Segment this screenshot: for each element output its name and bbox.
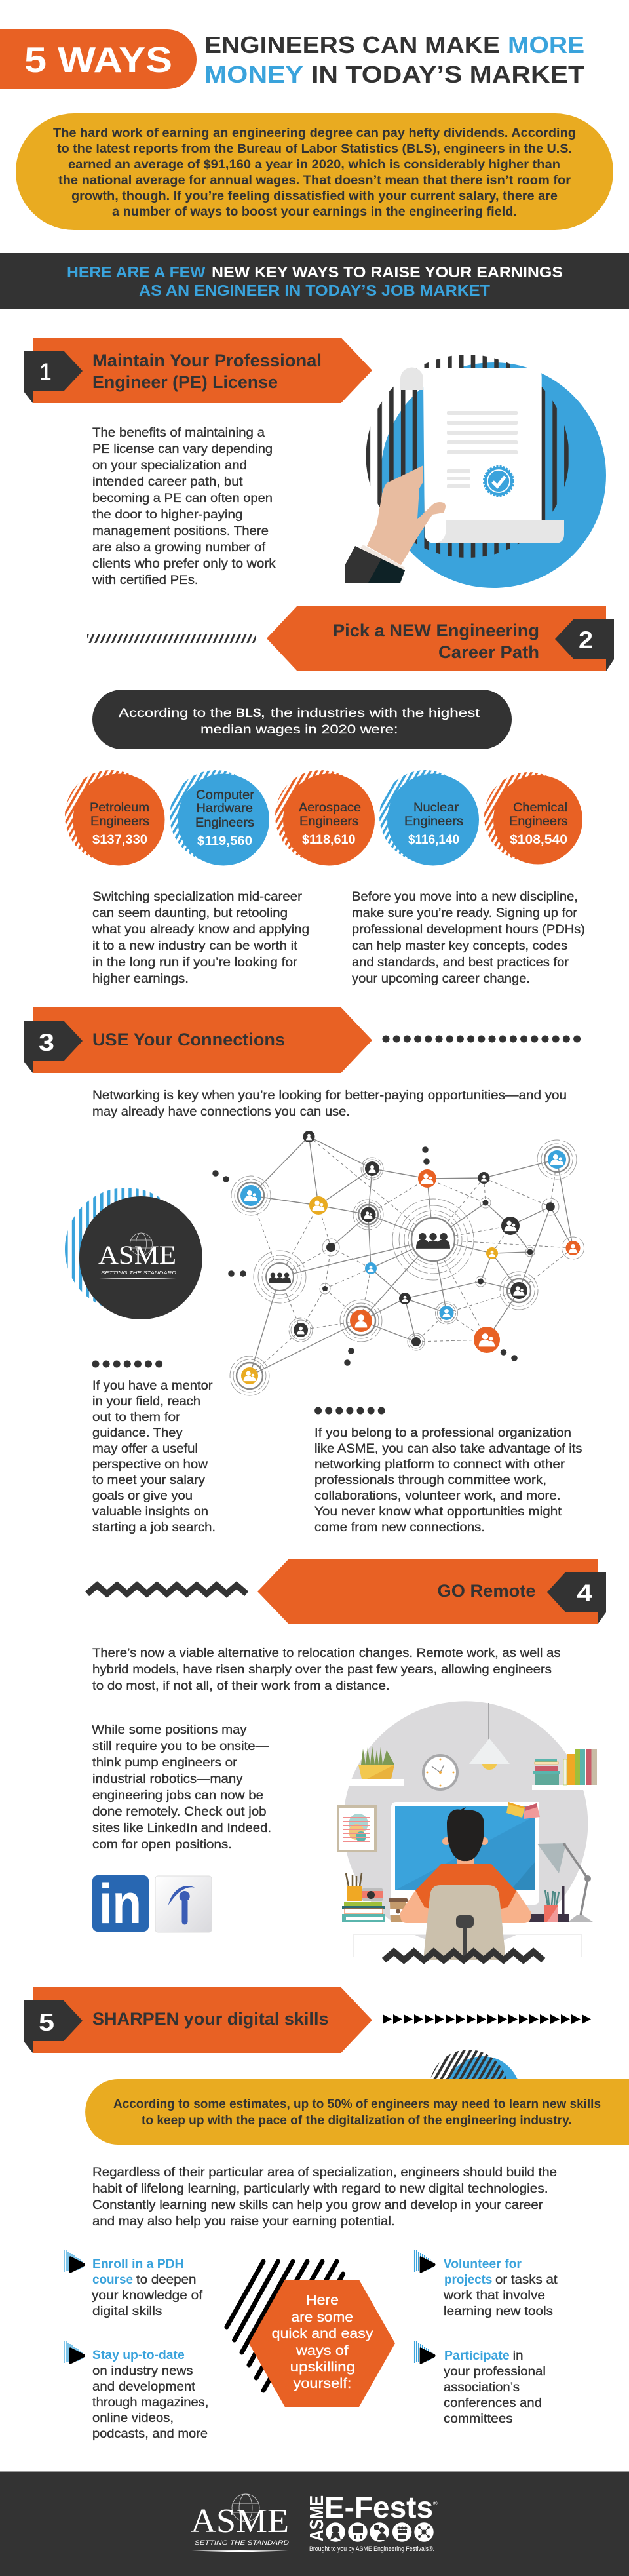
circle: aerospace engineers: $118,610 <box>302 832 356 847</box>
circle: computer hardware engineers: Hardware <box>197 801 253 815</box>
section 2 banner: Pick a NEW Engineering <box>333 621 539 640</box>
illustration: hand holding certificate <box>345 355 606 588</box>
network person nodes <box>240 1131 581 1384</box>
circle: chemical engineers: Chemical <box>513 800 567 815</box>
arrow row <box>383 2014 591 2024</box>
section 2 left text: Switching specialization mid-career <box>92 890 303 904</box>
book shelf <box>532 1749 600 1790</box>
section 2 banner <box>267 606 614 671</box>
intro callout: The hard work of earning an engineering degree can pay hefty dividends. According <box>53 127 576 140</box>
section 4 intro text: to do most, if not all, of their work from a distance. <box>92 1679 390 1693</box>
tip: participate <box>415 2341 546 2426</box>
desk lamp <box>537 1843 593 1922</box>
section 2 right text: make sure you’re ready. Signing up for <box>352 907 578 920</box>
network diagram <box>212 1131 584 1395</box>
circle: nuclear engineers: Nuclear <box>413 800 459 815</box>
section 2 left text: can seem daunting, but retooling <box>92 907 288 920</box>
tip: participate: conferences and <box>444 2396 542 2410</box>
section 1 body text: are also a growing number of <box>92 541 266 555</box>
section 1 banner <box>24 338 372 403</box>
circle: chemical engineers <box>484 772 582 864</box>
intro callout <box>16 113 613 230</box>
section 3 left text: to meet your salary <box>92 1473 206 1487</box>
tip: enroll in a PDH: to deepen <box>136 2273 197 2287</box>
industries callout <box>92 690 512 749</box>
network dashed links <box>250 1137 573 1376</box>
hexagon callout: are some <box>292 2310 353 2325</box>
monitor <box>391 1802 539 1905</box>
ASME logo badge <box>65 1188 202 1319</box>
tip: enroll in a PDH <box>64 2250 203 2318</box>
yellow statistic band: According to some estimates, up to 50% of engineers may need to learn new skills <box>113 2098 601 2111</box>
title: MONEY <box>204 61 303 88</box>
circle: aerospace engineers <box>275 770 375 865</box>
section 2 right text: your upcoming career change. <box>352 972 530 986</box>
section 1 body text: becoming a PE can often open <box>92 492 273 505</box>
circle: nuclear engineers: Engineers <box>404 814 463 829</box>
section 5 body text: and may also help you raise your earning potential. <box>92 2215 395 2229</box>
section 3 right text: collaborations, volunteer work, and more. <box>314 1489 561 1503</box>
ASME logo badge: ASME <box>98 1240 176 1270</box>
wall clock <box>422 1754 459 1791</box>
icon: Indeed <box>155 1876 212 1932</box>
section 3 left text: in your field, reach <box>92 1395 200 1409</box>
section 5 banner: 5 <box>39 2009 54 2036</box>
circle: petroleum engineers <box>65 770 165 865</box>
section 2 left text: it to a new industry can be worth it <box>92 939 298 953</box>
section 2 left text: what you already know and applying <box>92 923 309 937</box>
tip: volunteer for projects: projects <box>444 2273 492 2287</box>
tip: volunteer for projects: or tasks at <box>495 2273 558 2287</box>
section 3 intro text <box>92 1089 567 1119</box>
office chair <box>423 1885 506 1960</box>
section 2 left text: in the long run if you’re looking for <box>92 956 298 969</box>
section 3 left text: may offer a useful <box>92 1442 198 1456</box>
section 1 banner: 1 <box>40 359 51 385</box>
industries callout: BLS, <box>236 706 265 720</box>
section 2 banner: 2 <box>579 627 593 654</box>
section 4 banner <box>257 1559 606 1624</box>
footer: E-Fests logo: ASME <box>307 2495 328 2541</box>
tip: participate: committees <box>444 2412 513 2426</box>
section 1 body text: the door to higher-paying <box>92 508 242 522</box>
circle: computer hardware engineers: $119,560 <box>197 834 252 848</box>
section 4 body text: think pump engineers or <box>92 1756 238 1770</box>
section 3 right text <box>314 1426 582 1534</box>
circle: computer hardware engineers: Computer <box>196 788 255 802</box>
intro callout: to the latest reports from the Bureau of Labor Statistics (BLS), engineers in the U.S. <box>57 142 572 156</box>
section 3 left text: guidance. They <box>92 1426 183 1440</box>
intro callout: earned an average of $91,160 a year in 2020, which is considerably higher than <box>68 158 560 172</box>
section 4 body text: engineering jobs can now be <box>92 1789 263 1803</box>
industries callout: According to the <box>119 707 232 720</box>
decorative hatch line <box>87 634 256 643</box>
section 4 body text: industrial robotics—many <box>92 1772 243 1786</box>
section 4 body text: sites like LinkedIn and Indeed. <box>92 1822 271 1835</box>
section 3 intro text: may already have connections you can use. <box>92 1105 350 1119</box>
intro callout: growth, though. If you’re feeling dissatisfied with your current salary, there are <box>71 189 558 203</box>
tip: stay up-to-date: Stay up-to-date <box>92 2349 185 2362</box>
circle: computer hardware engineers: Engineers <box>195 815 254 830</box>
yellow statistic band: to keep up with the pace of the digitalization of the engineering industry. <box>142 2114 572 2128</box>
section 3 left text: If you have a mentor <box>92 1379 213 1393</box>
section 3 intro text: Networking is key when you’re looking for better-paying opportunities—and you <box>92 1089 567 1103</box>
section 1 body text: on your specialization and <box>92 459 247 473</box>
tip: stay up-to-date: through magazines, <box>92 2396 208 2410</box>
section 3 right dots <box>318 1407 382 1415</box>
intro callout: a number of ways to boost your earnings in the engineering field. <box>112 205 517 219</box>
hexagon callout: yourself: <box>294 2376 351 2391</box>
hexagon callout <box>249 2280 395 2407</box>
person <box>400 1807 531 1923</box>
icon: play bullet <box>64 2341 85 2364</box>
footer: ASME logo: SETTING THE STANDARD <box>195 2539 289 2547</box>
hexagon callout: upskilling <box>290 2360 355 2375</box>
section 3 left text: out to them for <box>92 1411 181 1424</box>
section 5 banner: SHARPEN your digital skills <box>92 2009 329 2029</box>
section 3 right text: If you belong to a professional organization <box>314 1426 571 1440</box>
section 2 banner: Career Path <box>438 642 539 662</box>
header: 5 ways tab: 5 WAYS <box>24 39 172 80</box>
wall circle <box>343 1701 588 1946</box>
section 5 body text <box>92 2166 557 2229</box>
footer: E-Fests logo <box>307 2490 438 2553</box>
section 1 body text: management positions. There <box>92 524 269 538</box>
footer: E-Fests logo: E-Fests <box>324 2490 433 2524</box>
dotted line <box>386 1036 579 1042</box>
section 4 banner: 4 <box>577 1580 592 1607</box>
hexagon callout: Here <box>306 2293 339 2308</box>
zigzag line <box>87 1585 246 1594</box>
circle: aerospace engineers: Aerospace <box>299 800 361 815</box>
tip: stay up-to-date: online videos, <box>92 2411 174 2425</box>
tip: enroll in a PDH: course <box>92 2273 133 2287</box>
section 4 body text <box>92 1723 271 1852</box>
section 1 banner: Engineer (PE) License <box>92 372 278 392</box>
section 4 body text: While some positions may <box>92 1723 247 1737</box>
sticky notes <box>506 1802 540 1819</box>
network rings <box>230 1140 584 1395</box>
tip: participate: in <box>513 2349 523 2363</box>
footer: E-Fests logo: Brought to you by ASME Engineering Festivals®. <box>309 2545 434 2553</box>
ASME logo badge: SETTING THE STANDARD <box>101 1270 177 1276</box>
tip: stay up-to-date <box>64 2341 208 2441</box>
section 4 body text: com for open positions. <box>92 1838 232 1852</box>
section 3 left text: perspective on how <box>92 1458 208 1472</box>
hexagon callout: ways of <box>295 2343 349 2358</box>
section 3 right text: You never know what opportunities might <box>314 1505 562 1519</box>
desk items left <box>342 1873 408 1922</box>
decorative striped half circle <box>429 2050 520 2131</box>
footer <box>0 2471 629 2576</box>
tip: stay up-to-date: on industry news <box>92 2364 193 2378</box>
section 2 right text: Before you move into a new discipline, <box>352 890 578 904</box>
network solid links <box>250 1137 573 1376</box>
icon: play bullet <box>415 2250 436 2273</box>
section 1 body text <box>92 426 276 587</box>
section 5 body text: Constantly learning new skills can help you grow and develop in your career <box>92 2198 543 2212</box>
industries callout: median wages in 2020 were: <box>200 723 398 737</box>
section 2 left text: higher earnings. <box>92 972 189 986</box>
plant shelf <box>349 1746 404 1786</box>
section 1 body text: PE license can vary depending <box>92 442 273 456</box>
yellow statistic band <box>85 2079 629 2145</box>
tip: volunteer for projects: work that involve <box>443 2289 545 2303</box>
dark subheading band: AS AN ENGINEER IN TODAY’S JOB MARKET <box>139 282 490 299</box>
section 2 right text: professional development hours (PDHs) <box>352 923 585 937</box>
circle: nuclear engineers <box>379 770 479 865</box>
section 2 right text: and standards, and best practices for <box>352 956 569 969</box>
section 4 banner: GO Remote <box>438 1581 536 1601</box>
footer: ASME logo <box>191 2494 289 2552</box>
section 3 left dots <box>96 1361 160 1367</box>
circle: petroleum engineers: $137,330 <box>92 832 147 847</box>
section 3 banner: USE Your Connections <box>92 1030 285 1049</box>
section 5 banner <box>24 1987 372 2053</box>
section 3 left text: valuable insights on <box>92 1505 208 1519</box>
section 1 body text: clients who prefer only to work <box>92 557 276 571</box>
desk top <box>337 1922 596 1957</box>
section 4 intro text: There’s now a viable alternative to relocation changes. Remote work, as well as <box>92 1647 561 1660</box>
illustration: engineer working at desk <box>337 1701 600 1960</box>
tip: enroll in a PDH: digital skills <box>92 2305 162 2318</box>
section 4 intro text <box>92 1647 561 1693</box>
section 3 right text: networking platform to connect with other <box>314 1458 565 1472</box>
section 1 banner: Maintain Your Professional <box>92 351 322 370</box>
footer: ASME logo: ASME <box>191 2503 289 2540</box>
title: IN TODAY’S MARKET <box>311 61 584 88</box>
header: 5 ways tab <box>0 29 197 89</box>
circle: computer hardware engineers <box>170 770 269 865</box>
section 3 left text: goals or give you <box>92 1489 193 1503</box>
hexagon stripes <box>227 2261 343 2391</box>
title <box>204 31 584 88</box>
section 3 right text: professionals through committee work, <box>314 1473 546 1487</box>
section 4 body text: done remotely. Check out job <box>92 1805 267 1819</box>
dark subheading band: NEW KEY WAYS TO RAISE YOUR EARNINGS <box>212 263 563 281</box>
tip: stay up-to-date: podcasts, and more <box>92 2427 208 2441</box>
tip: participate: your professional <box>444 2365 546 2379</box>
section 3 left text <box>92 1379 216 1534</box>
tip: enroll in a PDH: Enroll in a PDH <box>92 2257 183 2271</box>
section 3 banner <box>24 1007 372 1073</box>
circle: nuclear engineers: $116,140 <box>408 832 459 847</box>
circle: chemical engineers: $108,540 <box>510 832 567 847</box>
title: ENGINEERS CAN MAKE <box>204 31 500 58</box>
icon: play bullet <box>415 2341 436 2364</box>
desk pens and router <box>529 1886 569 1922</box>
hexagon callout: quick and easy <box>272 2326 373 2341</box>
section 2 right text <box>352 890 585 986</box>
picture frame <box>338 1806 375 1851</box>
tip: volunteer for projects <box>415 2250 558 2318</box>
network plain dots <box>212 1146 518 1366</box>
footer: E-Fests logo: ® <box>433 2500 438 2507</box>
icon: play bullet <box>64 2250 85 2273</box>
zigzag line <box>384 1952 543 1960</box>
dark subheading band <box>0 253 629 309</box>
tip: stay up-to-date: and development <box>92 2380 196 2394</box>
tip: participate: association’s <box>444 2381 520 2394</box>
dark subheading band: HERE ARE A FEW <box>67 263 206 281</box>
circle: petroleum engineers: Engineers <box>90 814 149 829</box>
tip: participate: Participate <box>444 2349 510 2363</box>
tip: volunteer for projects: learning new tools <box>444 2305 553 2318</box>
circle: chemical engineers: Engineers <box>509 814 568 829</box>
section 1 body text: with certified PEs. <box>92 574 198 587</box>
tip: volunteer for projects: Volunteer for <box>444 2257 522 2271</box>
section 4 intro text: hybrid models, have risen sharply over the past few years, allowing engineers <box>92 1663 552 1677</box>
network hub nodes <box>266 1218 455 1291</box>
title: MORE <box>508 31 584 58</box>
circle: petroleum engineers: Petroleum <box>90 800 149 815</box>
section 1 body text: intended career path, but <box>92 475 243 489</box>
section 5 body text: Regardless of their particular area of specialization, engineers should build the <box>92 2166 557 2179</box>
icon: LinkedIn: in <box>99 1873 142 1936</box>
section 2 right text: can help master key concepts, codes <box>352 939 567 953</box>
pendant lamp <box>469 1703 510 1770</box>
section 4 body text: still require you to be onsite— <box>92 1740 269 1753</box>
section 3 left text: starting a job search. <box>92 1521 216 1534</box>
intro callout: the national average for annual wages. That doesn’t mean that there isn’t room for <box>58 174 571 187</box>
section 5 body text: habit of lifelong learning, particularly with regard to new digital technologies. <box>92 2182 548 2196</box>
circle: aerospace engineers: Engineers <box>299 814 358 829</box>
section 3 right text: come from new connections. <box>314 1521 485 1534</box>
section 1 body text: The benefits of maintaining a <box>92 426 265 440</box>
tip: enroll in a PDH: your knowledge of <box>92 2289 203 2303</box>
industries callout: the industries with the highest <box>271 707 480 720</box>
section 3 banner: 3 <box>39 1029 54 1056</box>
section 3 right text: like ASME, you can also take advantage of its <box>314 1442 582 1456</box>
section 2 left text <box>92 890 309 986</box>
